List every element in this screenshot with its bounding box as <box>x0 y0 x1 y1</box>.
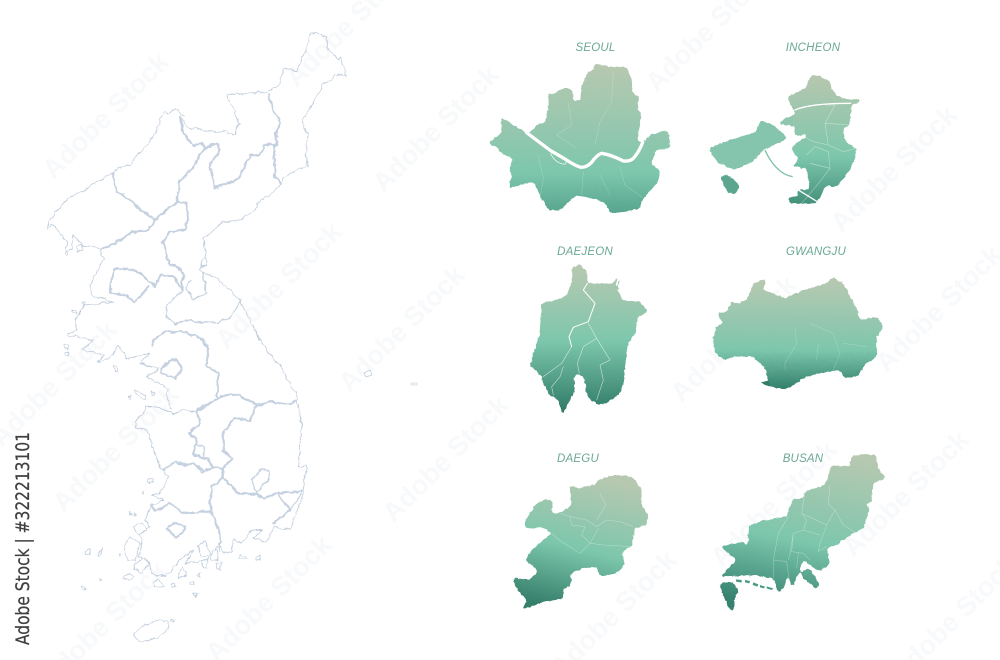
map: Busan <box>719 454 887 610</box>
watermark: Adobe Stock <box>377 389 515 528</box>
watermark: Adobe Stock <box>47 379 185 518</box>
map: Seoul <box>487 63 671 213</box>
islands east of the peninsula <box>364 370 417 385</box>
watermark: Adobe Stock <box>665 269 803 408</box>
land masses <box>708 75 862 203</box>
watermark: Adobe Stock <box>37 46 175 185</box>
watermark: Adobe Stock <box>837 424 975 563</box>
label: GWANGJU: GWANGJU <box>786 246 846 258</box>
label: DAEJEON: DAEJEON <box>557 246 613 258</box>
watermark: Adobe Stock <box>825 99 963 238</box>
map: Incheon <box>708 75 862 203</box>
label: INCHEON: INCHEON <box>786 42 841 54</box>
islands <box>63 345 260 641</box>
label: BUSAN: BUSAN <box>783 453 824 465</box>
watermark: Adobe Stock <box>210 216 348 355</box>
label: DAEGU: DAEGU <box>557 453 599 465</box>
label: SEOUL: SEOUL <box>576 42 616 54</box>
watermark: Adobe Stock <box>333 259 471 398</box>
map: Gwangju <box>713 278 884 390</box>
watermark: Adobe Stock <box>705 434 843 573</box>
map: north of Korean peninsula <box>47 33 346 340</box>
stock id side label: Adobe Stock | #322213101 <box>12 432 34 645</box>
map: Daejeon <box>530 264 648 415</box>
map: south of Korean peninsula <box>63 330 307 641</box>
map: Daegu <box>512 475 648 610</box>
watermark: Adobe Stock <box>367 59 505 198</box>
